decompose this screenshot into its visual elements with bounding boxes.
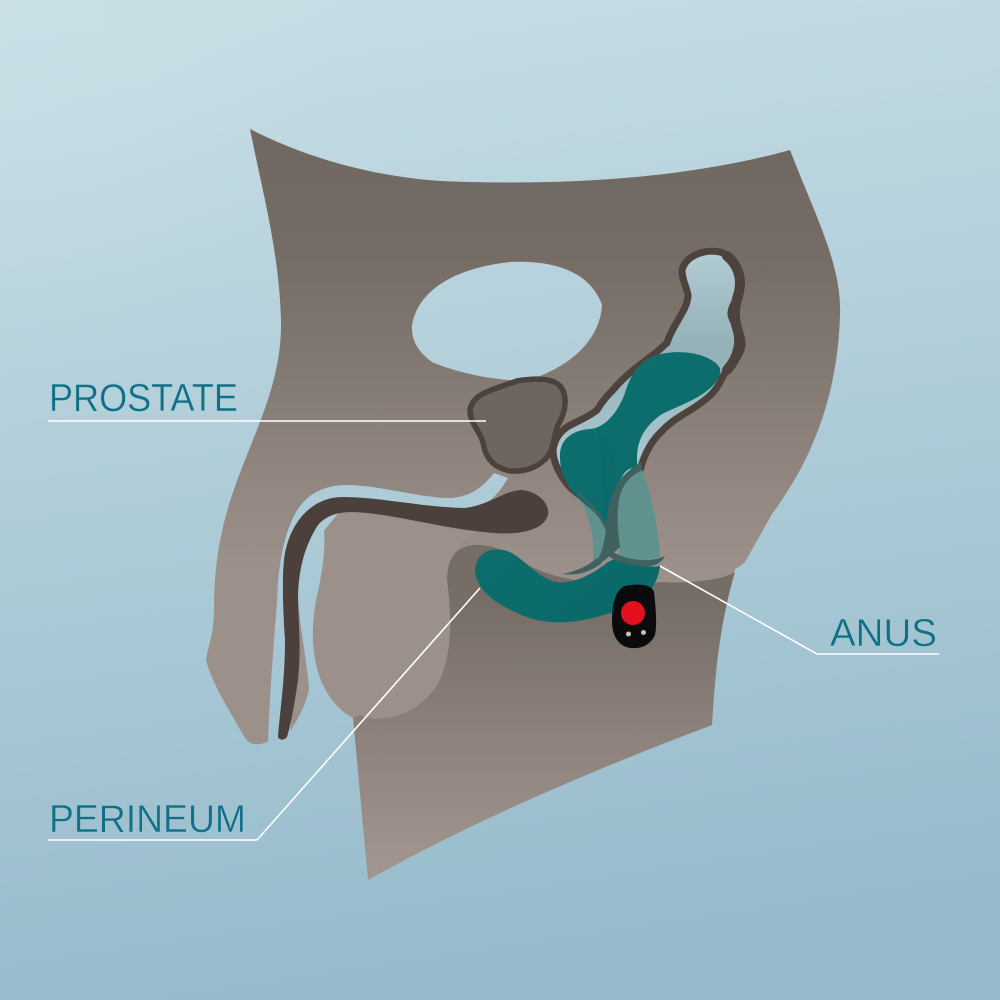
label: anus: ANUS xyxy=(830,612,937,655)
control unit xyxy=(612,585,656,648)
leader line: anus xyxy=(660,566,939,654)
rectum xyxy=(553,251,742,510)
red button xyxy=(621,601,645,625)
arm fold shading xyxy=(597,430,616,525)
anus wall tail right xyxy=(603,548,665,566)
translucent shaft right xyxy=(616,465,660,565)
torso silhouette xyxy=(206,129,840,744)
anus wall overlay xyxy=(592,462,642,568)
product xyxy=(475,352,720,648)
translucent shaft left xyxy=(578,495,608,570)
gap beside penis xyxy=(287,522,353,765)
bladder opening xyxy=(412,262,602,381)
control dots xyxy=(626,630,646,636)
label: perineum: PERINEUM xyxy=(49,798,246,841)
rectum thick wall xyxy=(727,256,740,370)
buttock edge xyxy=(640,480,780,576)
body cross-section xyxy=(206,129,840,880)
urethra channel xyxy=(268,473,508,742)
leader line: prostate xyxy=(48,420,486,422)
label: prostate: PROSTATE xyxy=(49,377,238,420)
external arm xyxy=(475,549,660,622)
anus wall tail left xyxy=(562,558,602,575)
anus wall edge left xyxy=(578,493,607,530)
insertable arm xyxy=(560,352,720,535)
leader line: perineum xyxy=(48,588,480,840)
urethra dark channel xyxy=(278,490,548,740)
leg section xyxy=(353,545,735,880)
rectum lumen and wall xyxy=(553,251,742,510)
scrotum xyxy=(312,505,480,719)
prostate xyxy=(470,379,565,471)
